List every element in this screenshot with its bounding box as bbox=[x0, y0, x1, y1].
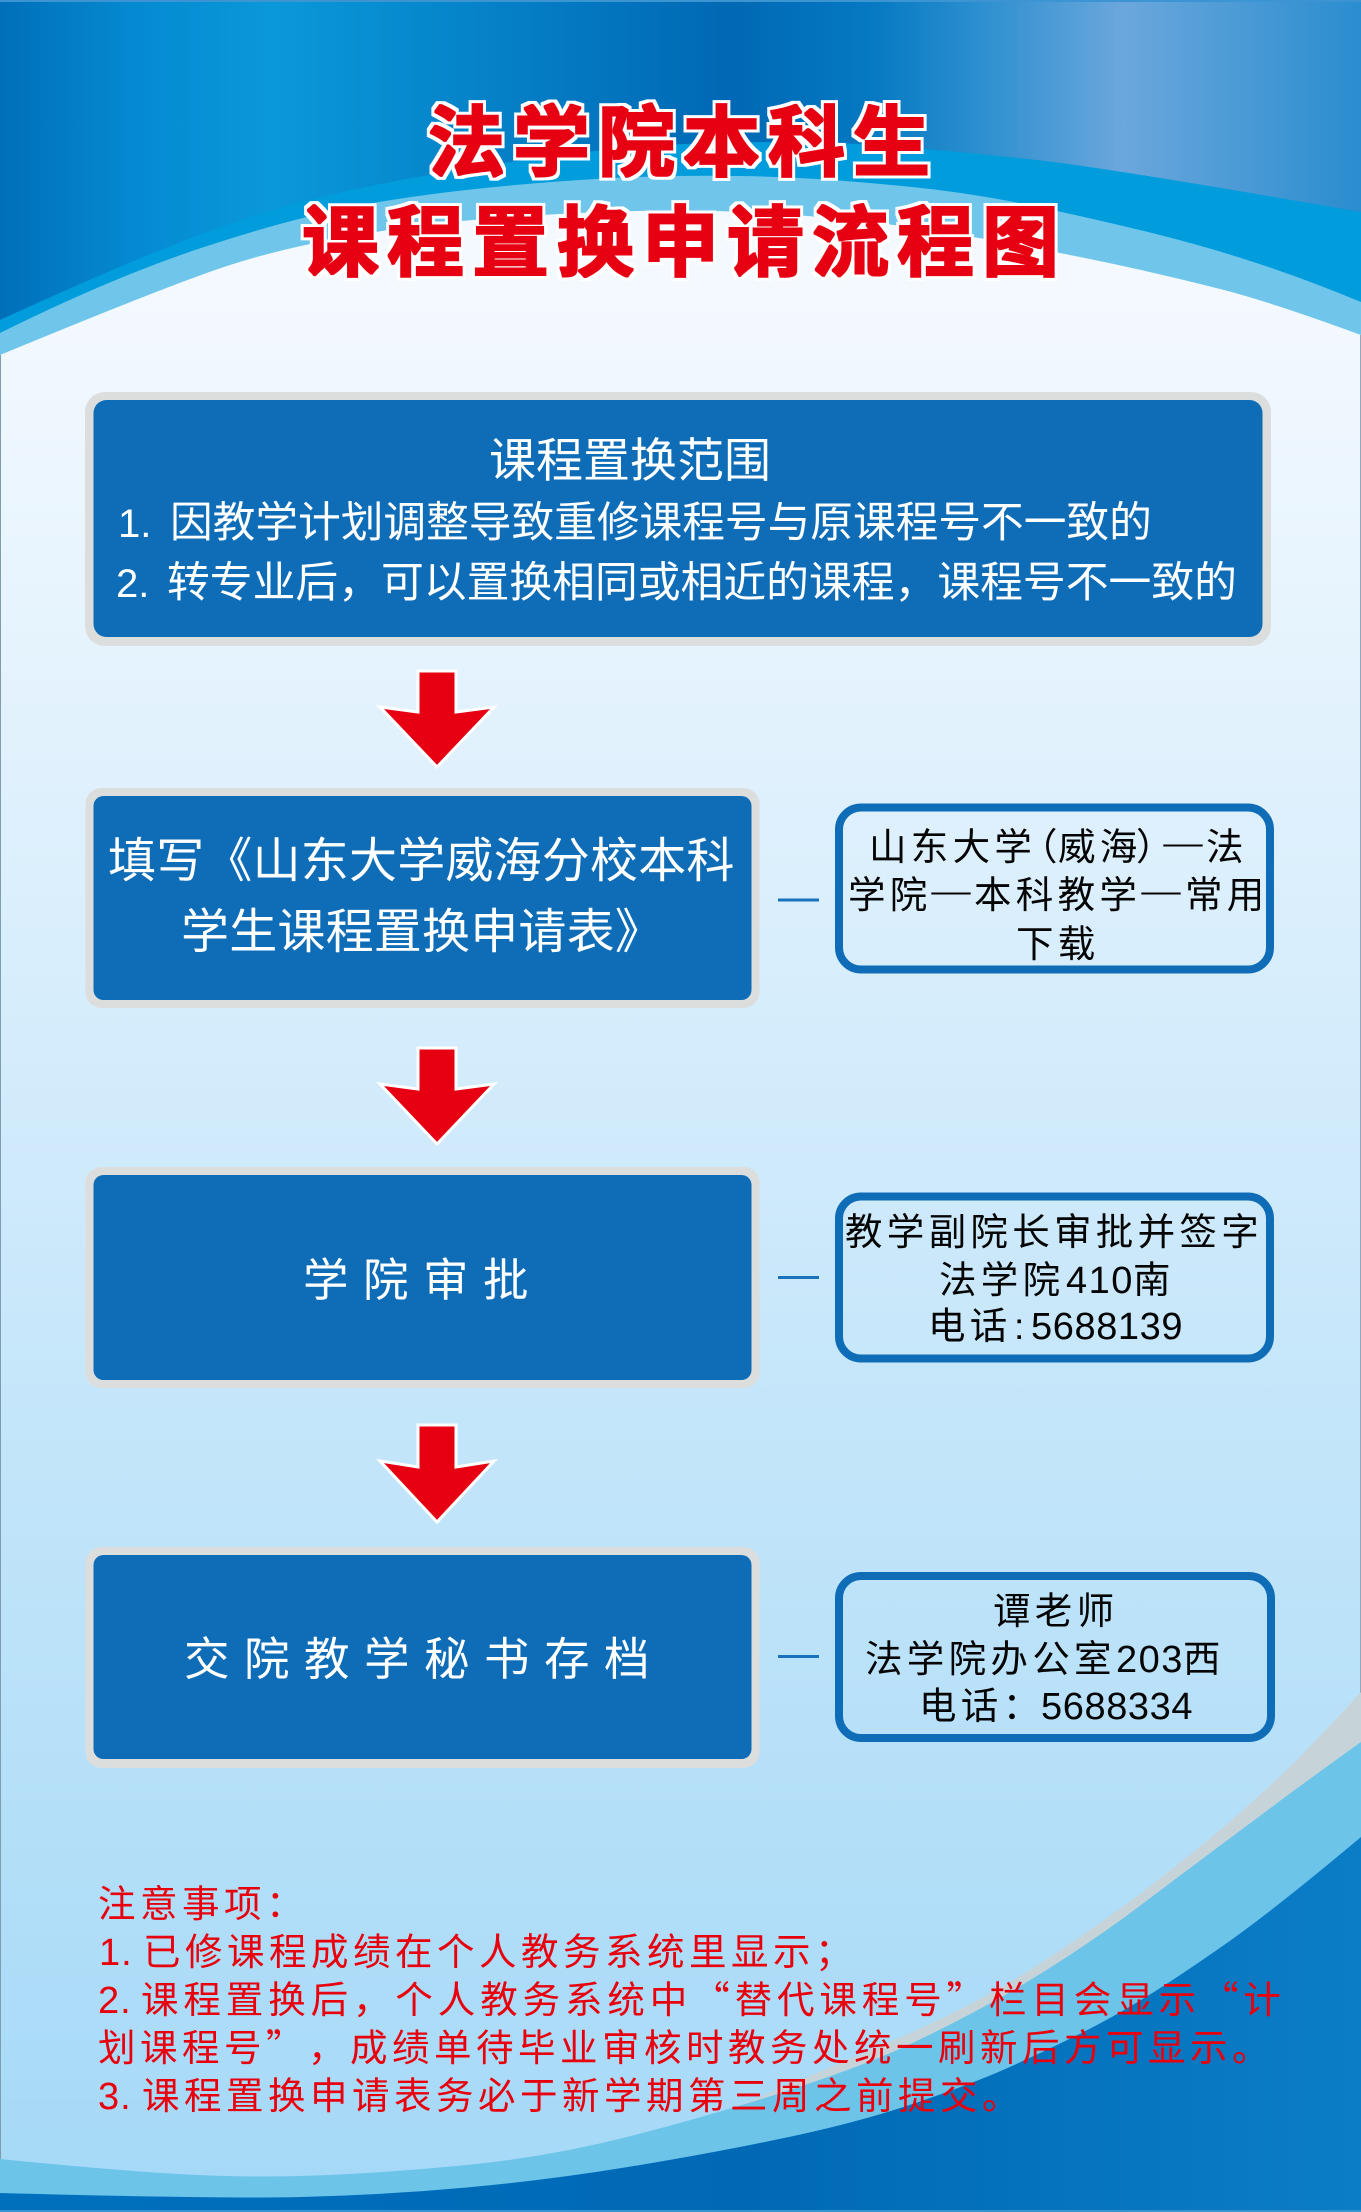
note text: 203 bbox=[1116, 1639, 1184, 1681]
arrow 3 bbox=[380, 1425, 494, 1522]
title: 课程置换申请流程图 bbox=[302, 201, 1067, 287]
approval text: 学院审批 bbox=[303, 1255, 543, 1306]
panel: scope of course replacement bbox=[85, 392, 1271, 646]
note text: 法学院 bbox=[939, 1259, 1064, 1301]
title: 法学院本科生 bbox=[428, 101, 938, 187]
note text: 常用 bbox=[1185, 874, 1269, 916]
archive text: 交院教学秘书存档 bbox=[184, 1634, 664, 1685]
note text: : bbox=[1014, 1305, 1029, 1347]
note 3: 3. bbox=[98, 2076, 132, 2118]
arrow 2 bbox=[380, 1048, 494, 1144]
note 2 continued: 成绩单待毕业审核时教务处统一刷新后方可显示。 bbox=[350, 2027, 1274, 2069]
panel: college approval bbox=[86, 1167, 760, 1388]
note text: 电话： bbox=[919, 1685, 1044, 1727]
scope item 1: 因教学计划调整导致重修课程号与原课程号不一致的 bbox=[170, 499, 1152, 547]
form name text: 填写《山东大学威海分校本科 bbox=[108, 835, 735, 888]
note: secretary contact bbox=[839, 1576, 1271, 1738]
note 2: 课程置换后，个人教务系统中 bbox=[141, 1979, 692, 2021]
note 2: “替代课程号”栏目会显示“计 bbox=[692, 1969, 1286, 2024]
notes heading: 注意事项： bbox=[98, 1883, 308, 1925]
note text: 下载 bbox=[1016, 923, 1100, 965]
note text: （ bbox=[1020, 816, 1062, 871]
note text: 5688334 bbox=[1041, 1686, 1193, 1728]
scope item 2: 转专业后，可以置换相同或相近的课程，课程号不一致的 bbox=[167, 559, 1237, 607]
note text: ） bbox=[1136, 816, 1178, 871]
note text: — bbox=[928, 859, 974, 925]
note text: 教学副院长审批并签字 bbox=[845, 1211, 1263, 1253]
note text: 本科教学 bbox=[974, 874, 1141, 916]
note 1: 1. bbox=[99, 1932, 133, 1974]
note: approval contact bbox=[839, 1196, 1270, 1358]
note text: 电话 bbox=[928, 1305, 1012, 1347]
scope item 1: 1. bbox=[118, 502, 151, 546]
note 1: 已修课程成绩在个人教务系统里显示； bbox=[143, 1931, 857, 1973]
title bbox=[302, 101, 1067, 287]
note text: 法 bbox=[1206, 826, 1248, 868]
note text: 山东大学 bbox=[869, 826, 1036, 868]
connector 1 bbox=[778, 898, 819, 902]
note text: 南 bbox=[1133, 1259, 1175, 1301]
note text: 威海 bbox=[1058, 826, 1142, 868]
panel: submit to secretary bbox=[86, 1547, 760, 1768]
note text: — bbox=[1138, 859, 1184, 925]
note 3: 课程置换申请表务必于新学期第三周之前提交。 bbox=[142, 2075, 1024, 2117]
form name text: 学生课程置换申请表》 bbox=[181, 906, 663, 959]
panel: fill in form bbox=[86, 788, 760, 1008]
note text: 谭老师 bbox=[993, 1590, 1118, 1632]
connector 2 bbox=[778, 1276, 819, 1279]
note text: — bbox=[1160, 811, 1206, 877]
note text: 学院 bbox=[848, 874, 932, 916]
note text: 西 bbox=[1183, 1638, 1225, 1680]
arrow 1 bbox=[380, 671, 494, 767]
scope item 2: 2. bbox=[116, 562, 149, 606]
note 2 continued: ， bbox=[308, 2027, 350, 2069]
note: download location bbox=[839, 808, 1270, 970]
note text: 法学院办公室 bbox=[865, 1638, 1116, 1680]
note 2: 2. bbox=[98, 1980, 132, 2022]
note text: 410 bbox=[1066, 1260, 1134, 1302]
connector 3 bbox=[778, 1655, 819, 1658]
panel heading: 课程置换范围 bbox=[489, 434, 771, 487]
notes bbox=[98, 1883, 1286, 2118]
note 2 continued: 划课程号 bbox=[98, 2027, 266, 2069]
note text: 5688139 bbox=[1031, 1306, 1183, 1348]
note 2 continued: ” bbox=[266, 2017, 308, 2072]
